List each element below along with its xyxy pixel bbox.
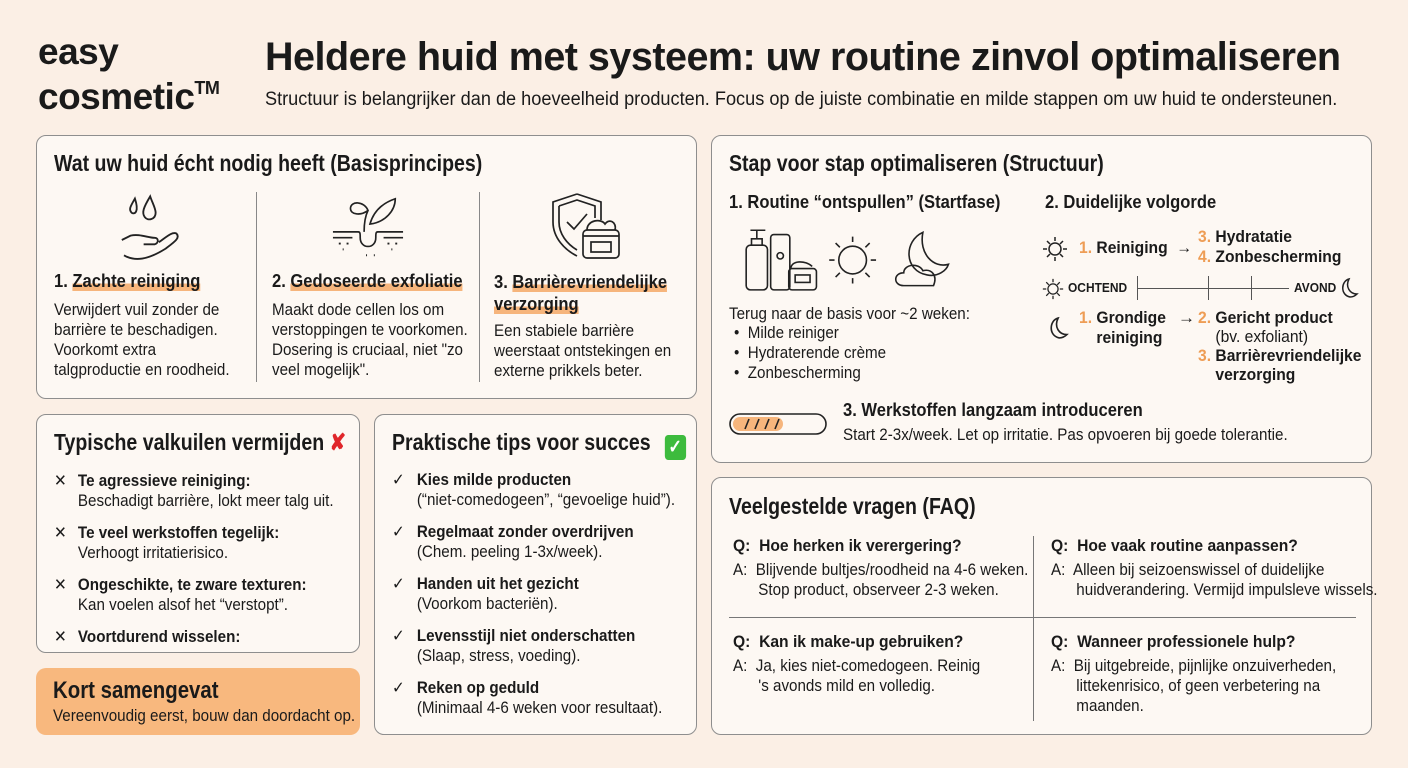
- column 1: talgproductie en roodheid.: [54, 361, 230, 379]
- faq 1: Stop product, observeer 2-3 weken.: [758, 581, 999, 599]
- column 3: 3. Barrièrevriendelijke: [494, 272, 667, 292]
- evening sequence: →: [1178, 308, 1195, 327]
- column 1: Verwijdert vuil zonder de: [54, 301, 219, 319]
- text 3: Start 2-3x/week. Let op irritatie. Pas opvoeren bij goede tolerantie.: [843, 426, 1288, 444]
- column 2: verstoppingen te voorkomen.: [272, 321, 468, 339]
- column 2: 2. Gedoseerde exfoliatie: [272, 271, 463, 291]
- icon: progress bar: [729, 413, 827, 435]
- list: (Slaap, stress, voeding).: [417, 647, 581, 665]
- list: Te agressieve reiniging:: [78, 472, 251, 490]
- faq 1: Q: Hoe herken ik verergering?: [733, 536, 962, 555]
- heading: Stap voor stap optimaliseren (Structuur): [729, 150, 1104, 176]
- faq 4: littekenrisico, of geen verbetering na: [1076, 677, 1320, 695]
- callout: kort samengevat: Kort samengevat: [53, 677, 219, 704]
- column 3: [494, 272, 671, 380]
- list: ✓: [392, 627, 405, 645]
- list: ✓: [392, 575, 405, 593]
- column 3: externe prikkels beter.: [494, 362, 643, 380]
- timeline: OCHTEND: [1068, 280, 1127, 295]
- evening sequence: 2. Gericht product: [1198, 308, 1333, 327]
- icon: pore with leaves: [332, 198, 404, 256]
- list: (Minimaal 4-6 weken voor resultaat).: [417, 699, 662, 717]
- faq 3: [733, 632, 980, 695]
- logo: easy: [38, 31, 118, 72]
- faq 2: [1051, 536, 1378, 599]
- faq 3: A: Ja, kies niet-comedogeen. Reinig: [733, 657, 980, 675]
- column 3: weerstaat ontstekingen en: [494, 342, 671, 360]
- list: [392, 471, 675, 717]
- heading: ✓: [668, 437, 682, 458]
- icon: shield with jar: [552, 193, 620, 259]
- panel: praktische tips: [374, 414, 697, 735]
- heading: Wat uw huid écht nodig heeft (Basisprincipes): [54, 150, 482, 176]
- column 2: [272, 271, 468, 379]
- panel: basisprincipes: [36, 135, 697, 399]
- list: ✓: [392, 679, 405, 697]
- column 2: veel mogelijk".: [272, 361, 369, 379]
- evening sequence: verzorging: [1215, 365, 1295, 384]
- subheading 2: 2. Duidelijke volgorde: [1045, 192, 1216, 212]
- evening sequence: 1. Grondige: [1079, 308, 1166, 327]
- evening sequence: reiniging: [1096, 328, 1162, 347]
- list: (Voorkom bacteriën).: [417, 595, 558, 613]
- column 1: Voorkomt extra: [54, 341, 156, 359]
- faq 4: maanden.: [1076, 697, 1144, 715]
- list: ✕: [54, 576, 67, 594]
- list: ✕: [54, 628, 67, 646]
- subheading 1: 1. Routine “ontspullen” (Startfase): [729, 192, 1000, 212]
- list: Levensstijl niet onderschatten: [417, 627, 635, 645]
- column 1: barrière te beschadigen.: [54, 321, 218, 339]
- evening sequence: [1050, 308, 1361, 384]
- faq 2: huidverandering. Vermijd impulsleve wissels.: [1076, 581, 1378, 599]
- evening sequence: 3. Barrièrevriendelijke: [1198, 346, 1361, 365]
- column 1: 1. Zachte reiniging: [54, 271, 200, 291]
- timeline: AVOND: [1294, 280, 1336, 295]
- morning sequence: [1043, 227, 1341, 266]
- bullets: • Hydraterende crème: [734, 344, 886, 362]
- heading: Typische valkuilen vermijden ✘: [54, 429, 346, 455]
- faq 4: Q: Wanneer professionele hulp?: [1051, 632, 1295, 651]
- panel: FAQ: [711, 477, 1372, 735]
- list: ✓: [392, 471, 405, 489]
- faq 3: Q: Kan ik make-up gebruiken?: [733, 632, 963, 651]
- morning sequence: 3. Hydratatie: [1198, 227, 1292, 246]
- list: (“niet-comedogeen”, “gevoelige huid”).: [417, 491, 675, 509]
- icon: products: [745, 230, 950, 291]
- list: Handen uit het gezicht: [417, 575, 579, 593]
- faq 2: A: Alleen bij seizoenswissel of duidelijke: [1051, 561, 1324, 579]
- column 1: [54, 271, 230, 379]
- morning sequence: 4. Zonbescherming: [1198, 247, 1341, 266]
- bullets: • Milde reiniger: [734, 324, 839, 342]
- list: Regelmaat zonder overdrijven: [417, 523, 634, 541]
- text: basis: Terug naar de basis voor ~2 weken:: [729, 305, 970, 323]
- subheading 3: 3. Werkstoffen langzaam introduceren: [843, 400, 1143, 420]
- heading: Veelgestelde vragen (FAQ): [729, 493, 976, 519]
- column 2: Maakt dode cellen los om: [272, 301, 444, 319]
- column 3: Een stabiele barrière: [494, 322, 634, 340]
- divider: [479, 192, 480, 382]
- list: Kies milde producten: [417, 471, 571, 489]
- heading: Praktische tips voor succes: [392, 429, 651, 455]
- callout: kort samengevat: [36, 668, 360, 735]
- icon: hand with drops: [121, 194, 179, 260]
- faq 4: A: Bij uitgebreide, pijnlijke onzuiverheden,: [1051, 657, 1336, 675]
- timeline: [1042, 276, 1359, 300]
- morning sequence: 1. Reiniging →: [1079, 238, 1192, 257]
- panel: valkuilen: [36, 414, 360, 653]
- column 2: Dosering is cruciaal, niet "zo: [272, 341, 463, 359]
- subtitle: Structuur is belangrijker dan de hoeveelheid producten. Focus op de juiste combinatie en milde stappen om uw huid te ondersteunen.: [265, 89, 1337, 110]
- list: ✕: [54, 524, 67, 542]
- faq 2: Q: Hoe vaak routine aanpassen?: [1051, 536, 1298, 555]
- faq 1: [733, 536, 1028, 599]
- title: Heldere huid met systeem: uw routine zinvol optimaliseren: [265, 35, 1341, 79]
- faq 4: [1051, 632, 1336, 715]
- faq 1: A: Blijvende bultjes/roodheid na 4-6 weken.: [733, 561, 1028, 579]
- list: Verhoogt irritatierisico.: [78, 544, 228, 562]
- logo: [38, 31, 219, 117]
- list: Ongeschikte, te zware texturen:: [78, 576, 307, 594]
- list: (Chem. peeling 1-3x/week).: [417, 543, 602, 561]
- callout: kort samengevat: Vereenvoudig eerst, bouw dan doordacht op.: [53, 707, 355, 725]
- list: [54, 472, 334, 646]
- list: Reken op geduld: [417, 679, 539, 697]
- list: Te veel werkstoffen tegelijk:: [78, 524, 279, 542]
- list: Kan voelen alsof het “verstopt”.: [78, 596, 288, 614]
- faq 3: 's avonds mild en volledig.: [758, 677, 935, 695]
- divider: [256, 192, 257, 382]
- list: ✕: [54, 472, 67, 490]
- bullets: [734, 324, 886, 382]
- evening sequence: (bv. exfoliant): [1215, 327, 1308, 346]
- list: ✓: [392, 523, 405, 541]
- list: Beschadigt barrière, lokt meer talg uit.: [78, 492, 334, 510]
- column 3: verzorging: [494, 294, 579, 314]
- bullets: • Zonbescherming: [734, 364, 861, 382]
- logo: cosmeticTM: [38, 76, 219, 117]
- list: Voortdurend wisselen:: [78, 628, 240, 646]
- panel: structuur: [711, 135, 1372, 463]
